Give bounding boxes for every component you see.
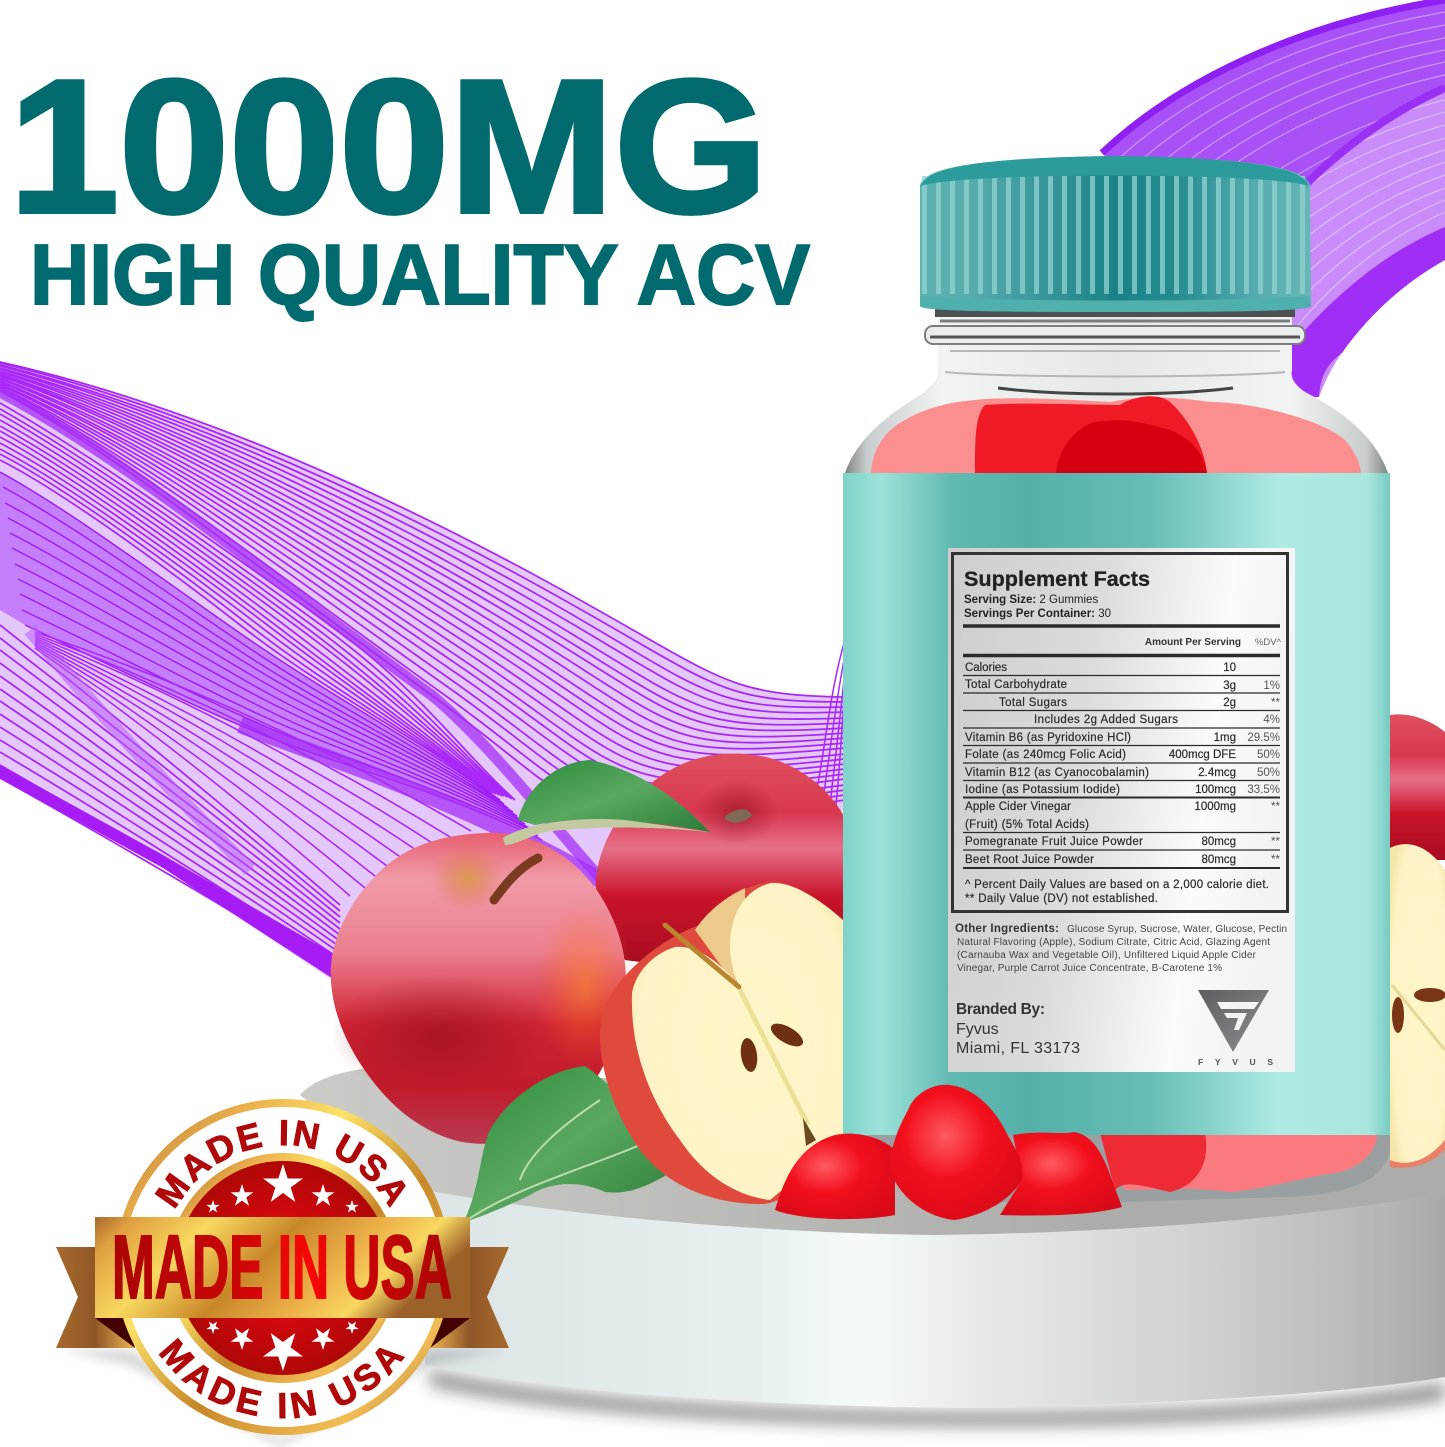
- other ingredients: (Carnauba Wax and Vegetable Oil), Unfiltered Liquid Apple Cider: [957, 950, 1257, 961]
- supplement facts panel: [948, 548, 1295, 1072]
- branded by address: Miami, FL 33173: [956, 1040, 1080, 1057]
- nutrient rows: 50%: [1257, 767, 1280, 779]
- nutrient rows: **: [1271, 854, 1281, 866]
- nutrient rows: Apple Cider Vinegar: [965, 801, 1071, 813]
- ribbon bottom edge: [0, 765, 335, 980]
- gummies inside shoulder: [871, 396, 1361, 473]
- badge shadow: [60, 1350, 505, 1447]
- ribbon tails: [56, 1247, 509, 1348]
- other ingredients: Other Ingredients:: [955, 923, 1059, 935]
- nutrient rows: 80mcg: [1201, 836, 1236, 848]
- table header: Amount Per Serving: [1145, 637, 1241, 648]
- nutrient rows: [965, 662, 1281, 866]
- nutrient rows: 29.5%: [1247, 732, 1280, 744]
- bottle bottom glass with gummies: [860, 1130, 1390, 1202]
- nutrient rows: 10: [1223, 662, 1236, 674]
- curved text: bottom: MADE IN USA: [158, 1338, 406, 1419]
- nutrient rows: Vitamin B12 (as Cyanocobalamin): [965, 767, 1149, 779]
- nutrient rows: **: [1271, 801, 1281, 813]
- ribbon dark wedge: [240, 725, 600, 880]
- nutrient rows: Calories: [965, 662, 1007, 674]
- nutrient rows: 1000mg: [1194, 801, 1236, 813]
- branded by address: Branded By:: [956, 1001, 1045, 1018]
- serving information: Servings Per Container: 30: [964, 608, 1111, 620]
- made in USA badge: [56, 1099, 509, 1447]
- gold banner: [95, 1217, 470, 1318]
- display platform: [300, 1066, 1445, 1426]
- ribbon top band strands: [0, 362, 845, 819]
- nutrient rows: (Fruit) (5% Total Acids): [965, 819, 1089, 831]
- bottle cap: [920, 156, 1311, 312]
- icon: Fyvus logo: FYVUS: [1198, 1057, 1273, 1067]
- footnotes: ^ Percent Daily Values are based on a 2,000 calorie diet.: [965, 879, 1269, 891]
- banner text: MADE IN USA: [112, 1218, 452, 1318]
- icon: Fyvus logo: [1198, 990, 1273, 1067]
- serving information: Serving Size: 2 Gummies: [964, 594, 1098, 606]
- nutrient rows: 33.5%: [1247, 784, 1280, 796]
- nutrient rows: Vitamin B6 (as Pyridoxine HCl): [965, 732, 1131, 744]
- ribbon centre band strands: [0, 472, 542, 840]
- nutrient rows: Total Sugars: [999, 697, 1067, 709]
- nutrient rows: Includes 2g Added Sugars: [1034, 714, 1178, 726]
- nutrient rows: Iodine (as Potassium Iodide): [965, 784, 1120, 796]
- ribbon lower fan strands: [35, 632, 471, 896]
- nutrient rows: 2g: [1223, 697, 1236, 709]
- branded by address: [956, 1001, 1080, 1057]
- serving information: [964, 594, 1111, 620]
- footnotes: [965, 879, 1269, 905]
- ribbon sliver at bottle: [815, 640, 845, 805]
- purple wave ribbon: top right: [935, 0, 1445, 397]
- table rule lines: [963, 626, 1280, 868]
- apple leaf: lower: [463, 1066, 675, 1223]
- apple: right edge half apple: [1390, 844, 1445, 1168]
- curved text: top: MADE IN USA: [154, 1120, 406, 1209]
- nutrient rows: 3g: [1223, 680, 1236, 692]
- nutrient rows: **: [1271, 697, 1281, 709]
- bottle: [843, 156, 1390, 1202]
- nutrient rows: 50%: [1257, 749, 1280, 761]
- apple: back whole apple: [596, 754, 850, 964]
- nutrient rows: 2.4mcg: [1198, 767, 1236, 779]
- ribbon dense centre band: [0, 472, 542, 840]
- nutrient rows: Beet Root Juice Powder: [965, 854, 1094, 866]
- bottle glass neck and shoulder: [845, 305, 1388, 473]
- nutrient rows: 4%: [1263, 714, 1280, 726]
- apple: left whole apple: [330, 833, 635, 1144]
- nutrient rows: Folate (as 240mcg Folic Acid): [965, 749, 1126, 761]
- apple leaf: top: [503, 760, 710, 845]
- footnotes: ** Daily Value (DV) not established.: [965, 893, 1158, 905]
- ribbon lower wedge: [30, 630, 250, 870]
- purple wave ribbon: left sweep: [0, 362, 845, 985]
- ribbon dark seam: [0, 392, 600, 878]
- other ingredients: [955, 923, 1287, 974]
- headline: 1000MG: 1000MG: [9, 41, 768, 253]
- nutrient rows: 80mcg: [1201, 854, 1236, 866]
- nutrient rows: 1%: [1263, 680, 1280, 692]
- ribbon second band strands: [0, 403, 515, 800]
- other ingredients: Vinegar, Purple Carrot Juice Concentrate, B-Carotene 1%: [957, 963, 1222, 974]
- headline: high quality ACV: HIGH QUALITY ACV: [30, 228, 810, 323]
- nutrient rows: 1mg: [1214, 732, 1236, 744]
- facts title: Supplement Facts: [964, 567, 1150, 591]
- nutrient rows: 100mcg: [1195, 784, 1236, 796]
- facts box border: [952, 554, 1288, 912]
- seal circle: [115, 1099, 451, 1435]
- table header: %DV^: [1255, 637, 1282, 648]
- nutrient rows: 400mcg DFE: [1169, 749, 1236, 761]
- nutrient rows: Pomegranate Fruit Juice Powder: [965, 836, 1143, 848]
- other ingredients: Glucose Syrup, Sucrose, Water, Glucose, Pectin: [1067, 924, 1287, 935]
- nutrient rows: Total Carbohydrate: [965, 679, 1067, 691]
- ribbon bottom strands: [0, 625, 340, 977]
- nutrient rows: **: [1271, 836, 1281, 848]
- apple: right edge whole apple: [1390, 714, 1445, 860]
- branded by address: Fyvus: [956, 1021, 999, 1038]
- teal bottle label: [843, 473, 1390, 1135]
- red gummies in front: [775, 1085, 1122, 1220]
- apple: front half apple: [600, 882, 843, 1204]
- other ingredients: Natural Flavoring (Apple), Sodium Citrate, Citric Acid, Glazing Agent: [957, 937, 1270, 948]
- seal stars: [206, 1164, 359, 1371]
